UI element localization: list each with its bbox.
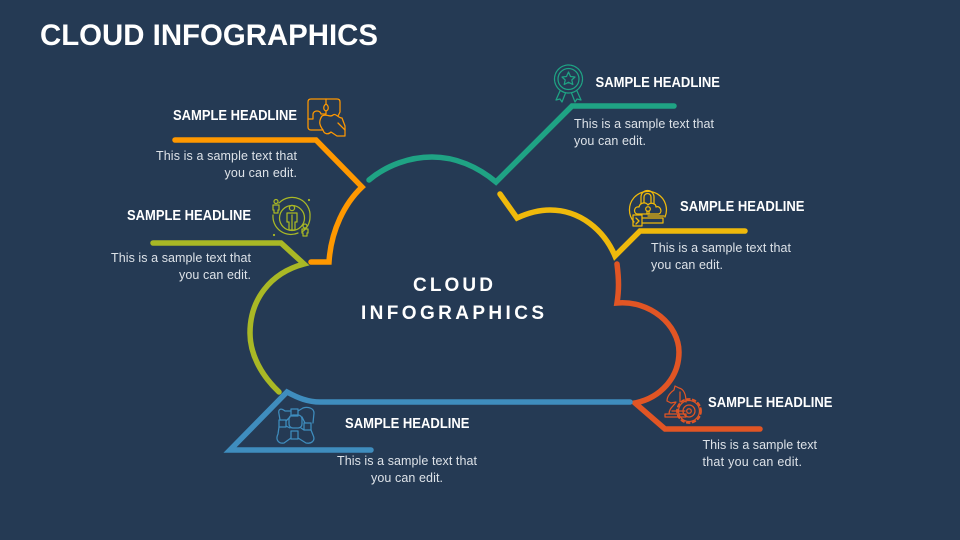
body text: This is a sample text that <box>574 117 715 131</box>
icon: linked hands <box>277 407 314 443</box>
body text: This is a sample text that <box>651 241 792 255</box>
title: CLOUD INFOGRAPHICS <box>40 19 378 52</box>
body text: This is a sample text that <box>111 251 252 265</box>
headline: SAMPLE HEADLINE <box>345 416 470 432</box>
icon: chess knight and gear <box>665 386 701 423</box>
body text: you can edit. <box>574 134 646 148</box>
lime cloud line <box>153 243 304 392</box>
body text <box>156 149 298 180</box>
body text: This is a sample text <box>702 438 818 452</box>
panel: blue segment <box>230 392 630 485</box>
body text: you can edit. <box>371 471 443 485</box>
red cloud line <box>617 264 760 429</box>
body text <box>651 241 792 272</box>
headline: SAMPLE HEADLINE <box>708 395 833 411</box>
panel: red segment <box>617 264 833 469</box>
body text: you can edit. <box>179 268 251 282</box>
body text: you can edit. <box>651 258 723 272</box>
center label: INFOGRAPHICS <box>361 303 544 324</box>
body text <box>702 438 818 469</box>
yellow cloud line <box>500 194 745 256</box>
teal cloud line <box>369 106 674 182</box>
body text: This is a sample text that <box>337 454 478 468</box>
body text <box>574 117 715 148</box>
panel: teal segment <box>369 65 720 182</box>
headline: SAMPLE HEADLINE <box>127 208 251 224</box>
icon: award ribbon <box>554 65 582 102</box>
icon: cloud lock and key <box>629 190 666 226</box>
body text: that you can edit. <box>702 455 802 469</box>
orange cloud line <box>175 140 362 262</box>
headline: SAMPLE HEADLINE <box>680 199 805 215</box>
headline: SAMPLE HEADLINE <box>173 108 297 124</box>
blue cloud line <box>230 392 630 450</box>
body text: This is a sample text that <box>156 149 298 163</box>
body text: you can edit. <box>224 166 297 180</box>
body text <box>337 454 478 485</box>
headline: SAMPLE HEADLINE <box>596 75 720 91</box>
panel: yellow segment <box>500 190 805 272</box>
icon: people circle <box>273 197 310 236</box>
panel: lime segment <box>111 197 310 392</box>
panel: orange segment <box>156 99 362 262</box>
icon: puzzle <box>308 99 345 136</box>
body text <box>111 251 252 282</box>
center label: CLOUD <box>413 275 493 296</box>
center label <box>361 275 544 324</box>
